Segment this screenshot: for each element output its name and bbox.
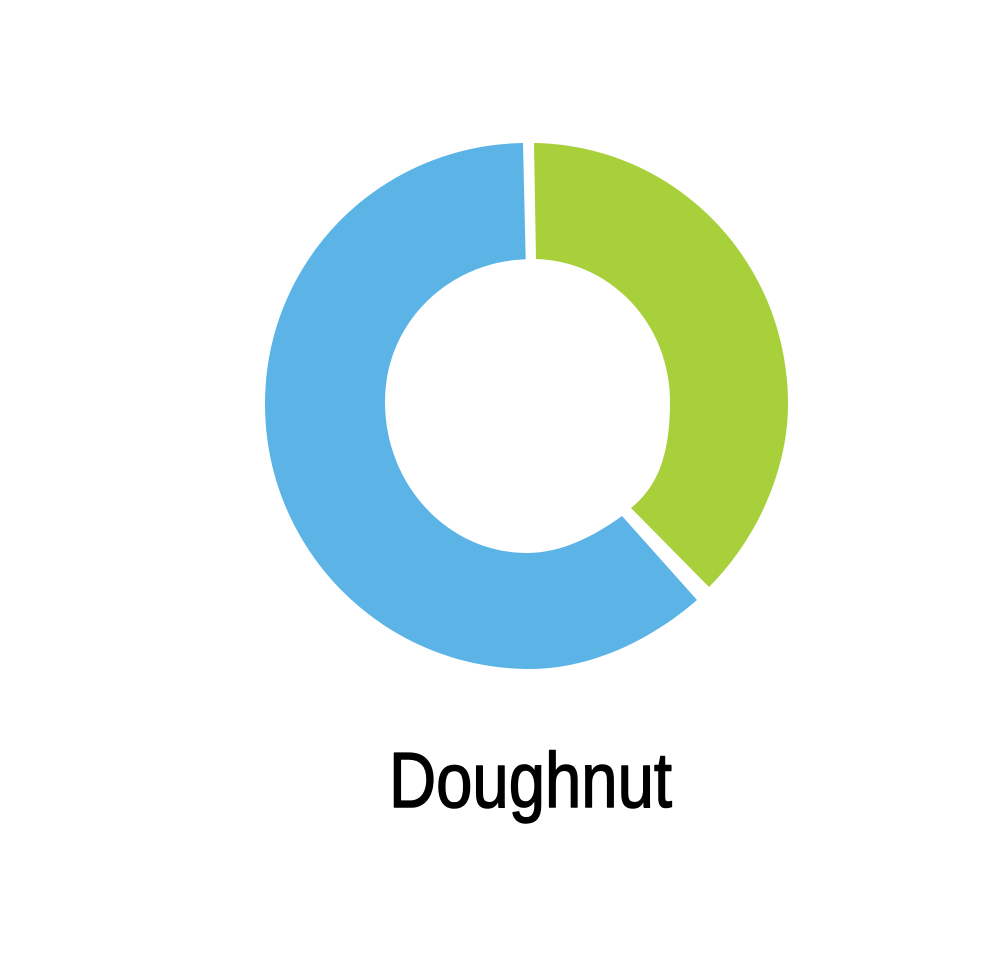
segment: blue	[265, 143, 697, 669]
segment: green	[534, 143, 788, 587]
title: Doughnut	[389, 736, 672, 824]
chart: doughnut	[265, 143, 788, 669]
